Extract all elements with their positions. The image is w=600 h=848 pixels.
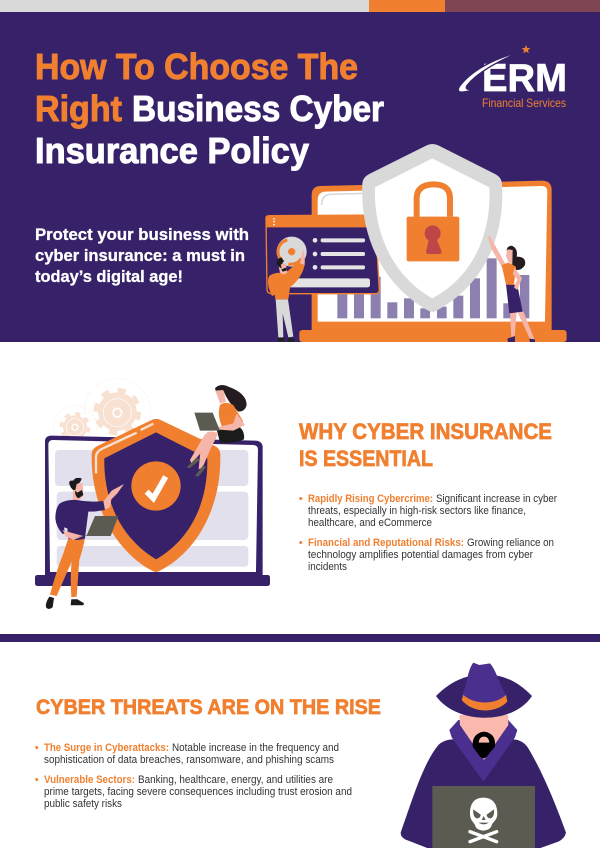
title: How To Choose The	[35, 46, 358, 87]
logo: ERM Financial Services: ERM	[482, 57, 567, 100]
bullet list: why essential: Significant increase in cyber	[436, 493, 557, 505]
bullet list: cyber threats: public safety risks	[44, 798, 123, 810]
section heading: why cyber insurance	[299, 419, 552, 471]
title: Insurance Policy	[35, 130, 309, 171]
person: woman sitting	[187, 385, 247, 477]
person: man at window	[268, 250, 305, 342]
panel: hero background	[0, 12, 600, 342]
bullet list: why essential: Financial and Reputational Risks:	[308, 537, 464, 549]
bullet list: cyber threats: Vulnerable Sectors:	[44, 774, 135, 786]
laptop screen	[312, 181, 552, 332]
bullet list: why essential: Rapidly Rising Cybercrime:	[308, 493, 433, 505]
section heading: cyber threats: CYBER THREATS ARE ON THE RISE	[36, 696, 381, 719]
bullet list: why essential: technology amplifies potential damages from cyber	[308, 549, 533, 561]
app window	[266, 215, 379, 294]
cloak	[401, 739, 566, 848]
bullet list: cyber threats: sophistication of data breaches, ransomware, and phishing scams	[44, 754, 335, 766]
bullet list: cyber threats: Banking, healthcare, energy, and utilities are	[138, 774, 333, 786]
section heading: why cyber insurance: WHY CYBER INSURANCE	[299, 419, 552, 444]
subtitle: today’s digital age!	[35, 267, 183, 286]
gears	[53, 378, 151, 449]
illustration: shield with check and people	[35, 378, 270, 609]
logo: ERM Financial Services	[458, 45, 567, 110]
bullet list: why essential: threats, especially in high-risk sectors like finance,	[308, 505, 526, 517]
top colour strip	[0, 0, 600, 12]
section heading: why cyber insurance: IS ESSENTIAL	[299, 446, 433, 471]
subtitle	[35, 225, 249, 286]
bullet list: cyber threats: prime targets, facing severe consequences including trust erosion and	[44, 786, 352, 798]
subtitle: cyber insurance: a must in	[35, 246, 245, 265]
title: Right	[35, 88, 122, 129]
subtitle: Protect your business with	[35, 225, 249, 244]
shield with padlock	[362, 144, 502, 312]
person: man with laptop	[46, 478, 124, 609]
bullet list: cyber threats: Notable increase in the frequency and	[172, 742, 339, 754]
bullet list: why essential: incidents	[308, 561, 348, 573]
collar	[449, 720, 517, 782]
laptop with skull	[432, 786, 535, 848]
divider band	[0, 634, 600, 642]
logo: ERM Financial Services: Financial Services	[482, 96, 566, 110]
bullet list: why essential: Growing reliance on	[467, 537, 554, 549]
bullet list: cyber threats	[35, 742, 352, 810]
laptop	[35, 436, 270, 586]
bullet list: why essential: healthcare, and eCommerce	[308, 517, 432, 529]
hat	[436, 663, 532, 718]
bar chart	[337, 258, 529, 318]
illustration: laptop with security shield	[266, 144, 567, 342]
title	[35, 46, 384, 171]
illustration: hacker with laptop	[401, 663, 566, 848]
bullet list: why essential	[299, 493, 557, 573]
bullet list: cyber threats: The Surge in Cyberattacks:	[44, 742, 169, 754]
person: woman pointing	[488, 236, 535, 342]
laptop base	[299, 330, 567, 342]
title: Business Cyber	[132, 88, 384, 129]
face and beard	[459, 715, 508, 760]
shield with check mark	[92, 419, 220, 572]
